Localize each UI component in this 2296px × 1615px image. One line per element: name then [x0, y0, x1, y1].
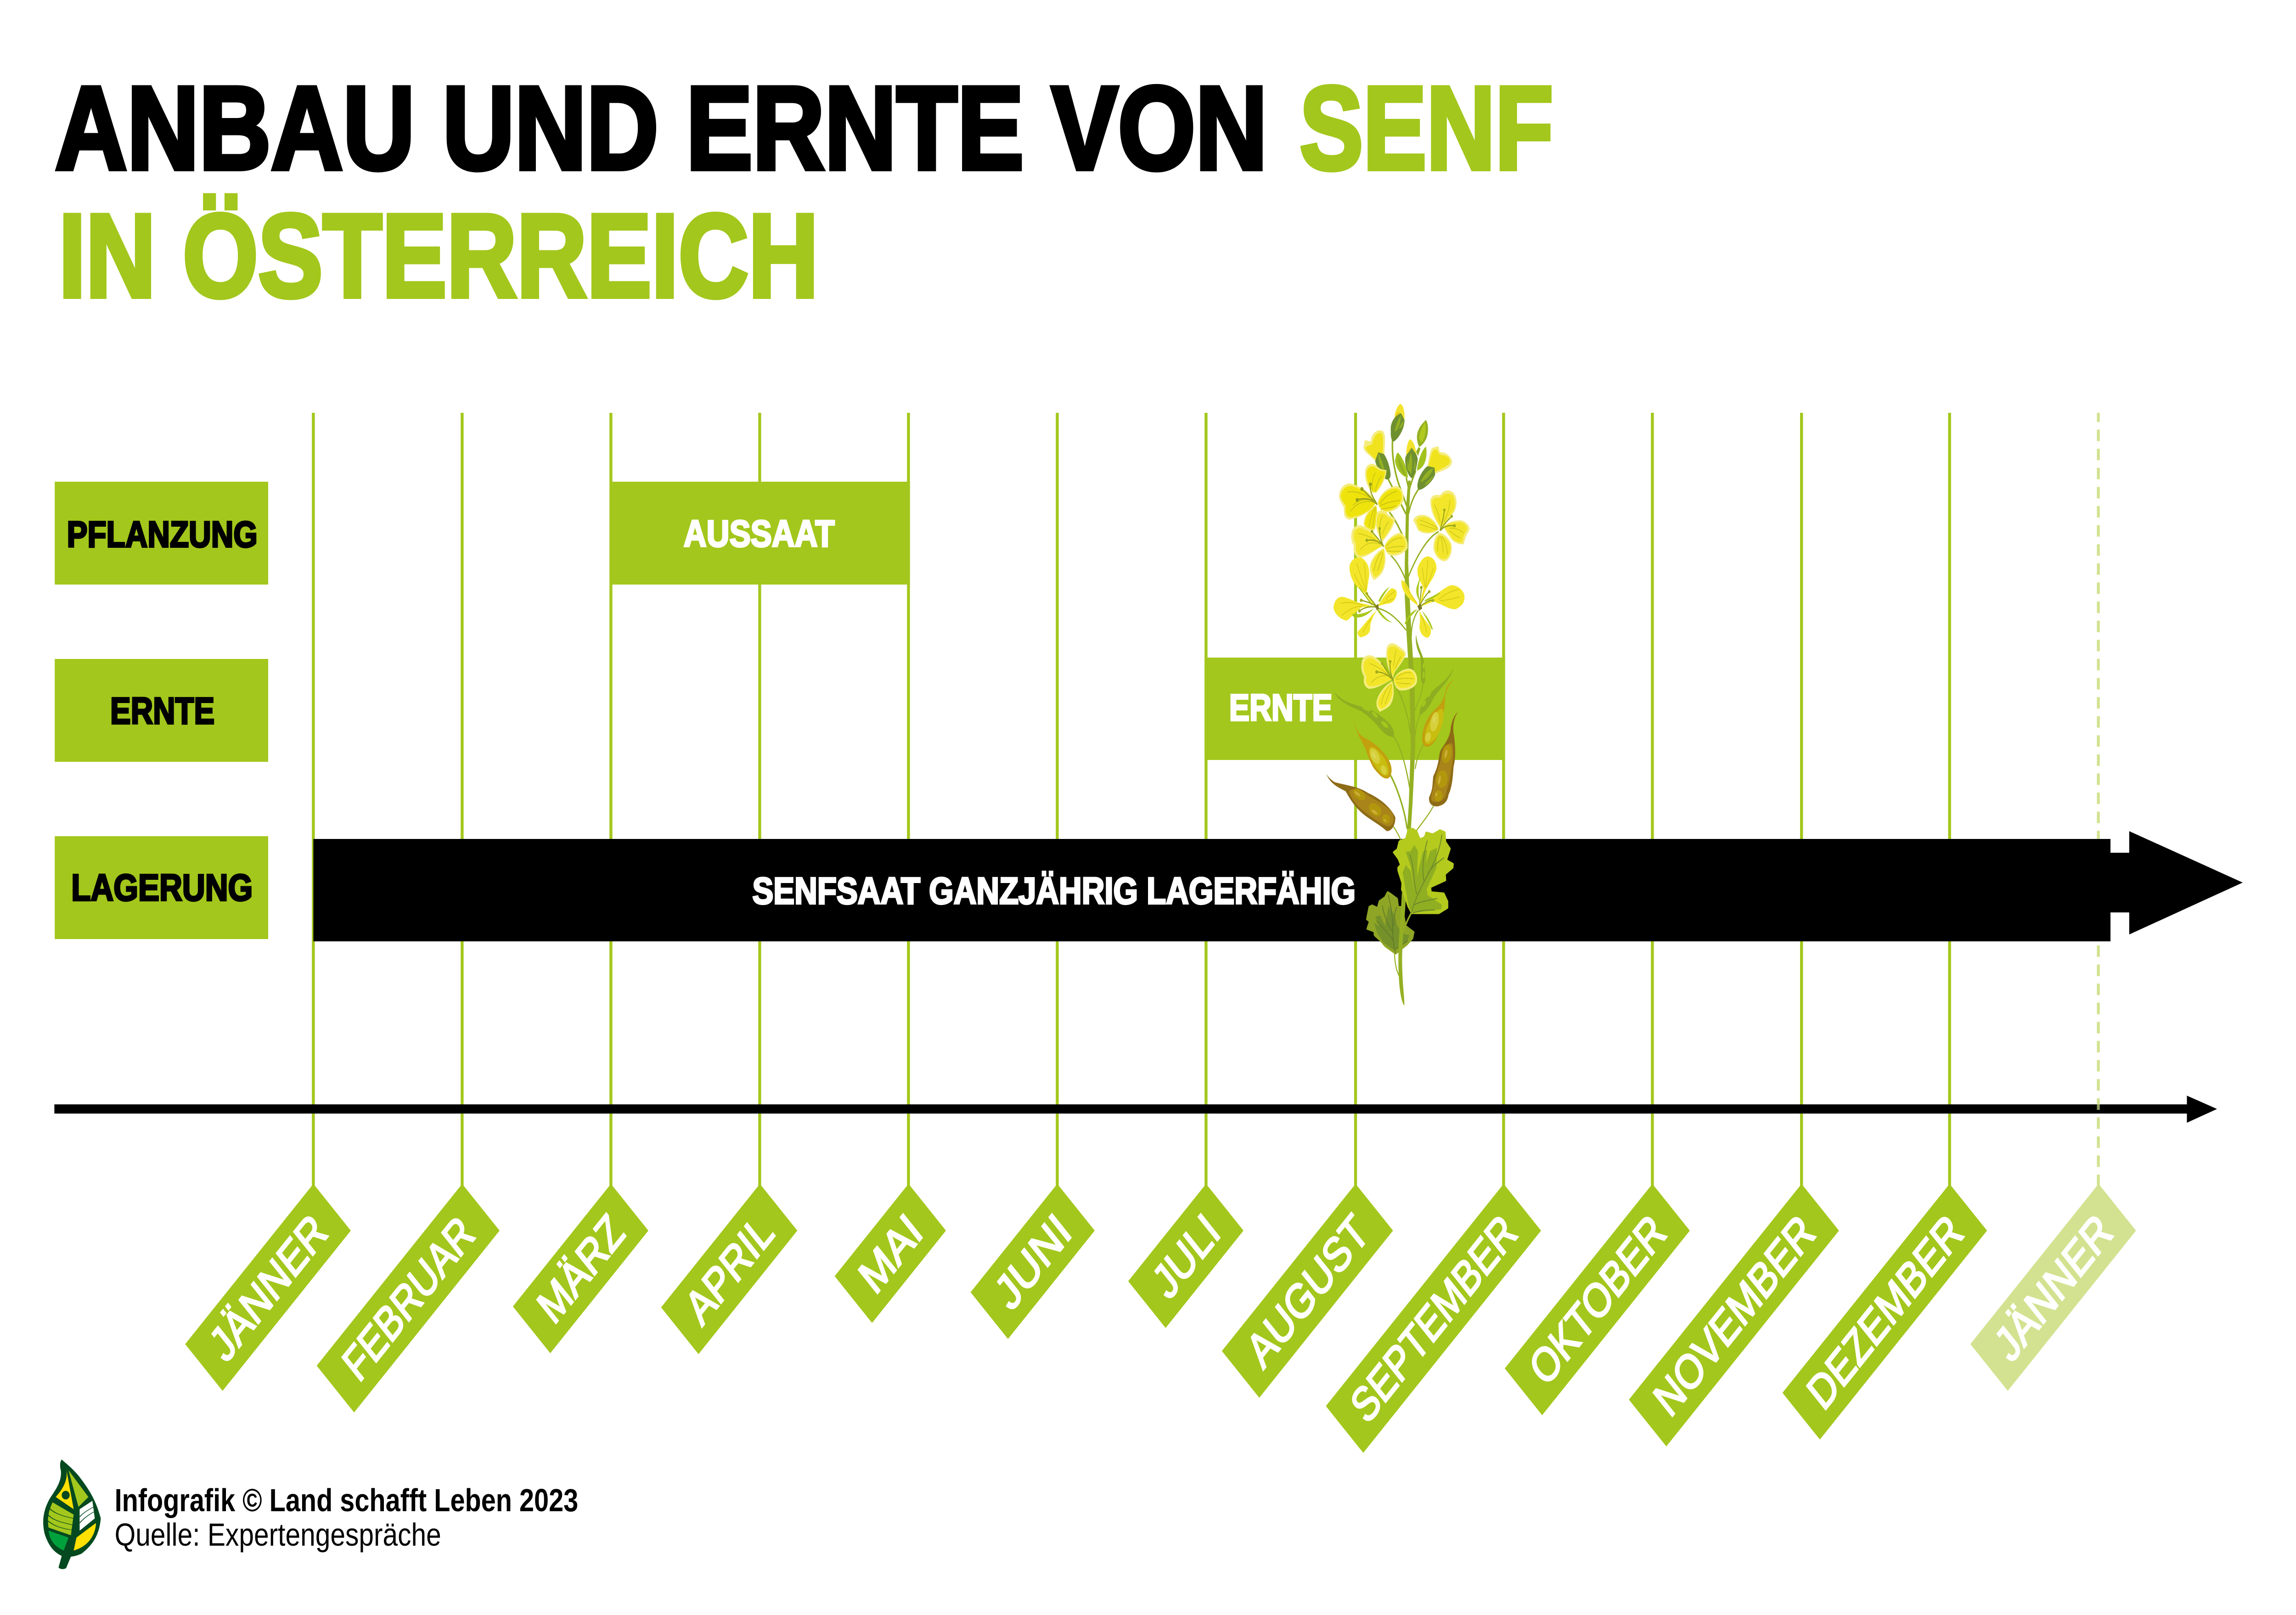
flower: open right — [1401, 557, 1464, 638]
bar: Aussaat — [610, 482, 910, 585]
month tag: September: SEPTEMBER — [1342, 1204, 1525, 1433]
flower: second left — [1351, 510, 1408, 580]
month tag: Oktober: OKTOBER — [1521, 1204, 1674, 1396]
upper leaf — [1394, 829, 1453, 931]
month grid lines — [313, 413, 1950, 1189]
illustration: mustard plant — [1326, 404, 1469, 1006]
lower stem — [1398, 892, 1406, 1006]
month tag: April — [661, 1184, 797, 1354]
title: SENF — [1300, 62, 1553, 194]
title: IN ÖSTERREICH — [59, 190, 818, 322]
main stem — [1405, 481, 1415, 833]
row label: Pflanzung — [55, 482, 268, 585]
row label: Lagerung — [55, 836, 268, 939]
month tag: Juli: JULI — [1144, 1204, 1228, 1309]
row label: Pflanzung: PFLANZUNG — [67, 514, 258, 555]
source credits: Quelle: Expertengespräche — [115, 1517, 441, 1553]
flower buds — [1363, 404, 1452, 490]
month tag: Juli — [1128, 1184, 1244, 1328]
month tag: Mai — [835, 1184, 946, 1323]
dashed line: next january — [2097, 413, 2100, 1186]
arrow bar: Lagerung — [313, 831, 2243, 941]
month tag: Juni: JUNI — [986, 1204, 1080, 1320]
month tag: August: AUGUST — [1238, 1204, 1377, 1378]
unripe green pods — [1334, 635, 1454, 737]
month tag: Februar: FEBRUAR — [334, 1206, 483, 1391]
month tag: März: MÄRZ — [529, 1204, 633, 1334]
month tag: Dezember: DEZEMBER — [1799, 1204, 1971, 1420]
logo: Land schafft Leben leaf — [43, 1459, 101, 1569]
flower: on harvest bar — [1361, 643, 1417, 712]
source credits: Infografik © Land schafft Leben 2023 — [115, 1483, 578, 1518]
row label: Ernte: ERNTE — [110, 690, 214, 732]
month tag: Jänner next year: JÄNNER — [1986, 1204, 2121, 1372]
month tag: April: APRIL — [677, 1204, 782, 1335]
bar: Aussaat: AUSSAAT — [684, 512, 835, 555]
month tag: Jänner: JÄNNER — [201, 1204, 335, 1372]
thin branches — [1378, 441, 1438, 840]
month tag: Juni — [971, 1184, 1095, 1339]
bar: Ernte: ERNTE — [1229, 687, 1333, 729]
flower: top left — [1339, 464, 1404, 531]
month tag: November: NOVEMBER — [1645, 1204, 1823, 1426]
row label: Ernte — [55, 659, 268, 762]
title: ANBAU UND ERNTE VON — [55, 62, 1267, 194]
flower: top right — [1413, 490, 1469, 561]
bar: Ernte — [1204, 658, 1505, 760]
month tag: März — [513, 1184, 648, 1353]
title — [55, 62, 1553, 322]
lower leaf — [1367, 892, 1414, 975]
arrow bar: Lagerung: SENFSAAT GANZJÄHRIG LAGERFÄHIG — [752, 870, 1356, 912]
ripe pods — [1326, 680, 1458, 831]
row label: Lagerung: LAGERUNG — [71, 867, 253, 909]
flower: open left — [1334, 557, 1397, 637]
timeline arrow — [54, 1096, 2217, 1123]
source credits — [115, 1483, 578, 1553]
month tag: Mai: MAI — [850, 1204, 931, 1304]
